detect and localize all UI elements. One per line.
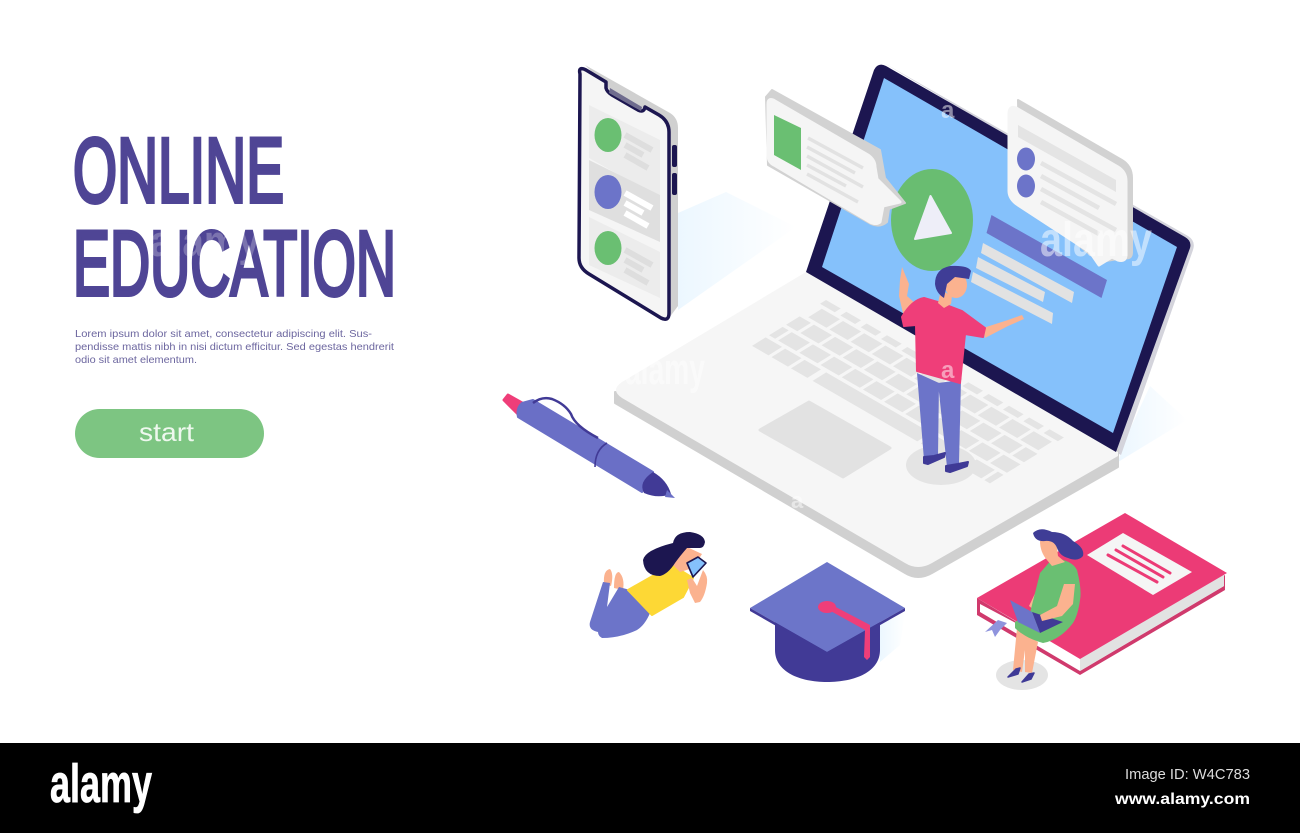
watermarks: alamy [625, 345, 705, 394]
body text: Lorem ipsum dolor sit amet, consectetur adipiscing elit. Sus- [75, 328, 373, 340]
face [945, 272, 967, 298]
phone notch detail [609, 88, 642, 111]
phone in hand [687, 557, 706, 577]
pointing arm [983, 315, 1024, 338]
phone card two [589, 160, 660, 242]
phone buttons [672, 145, 677, 195]
feet [604, 569, 624, 590]
legs [1013, 628, 1038, 673]
legs [917, 373, 961, 467]
book cover [977, 513, 1227, 659]
watermarks: alamy [150, 217, 260, 266]
graduation cap [750, 562, 905, 682]
shadow under man [906, 445, 976, 485]
girl lying with phone [590, 532, 707, 638]
title: ONLINE [73, 120, 284, 222]
play button [891, 169, 973, 271]
pen tip [642, 472, 671, 496]
start button: start [139, 417, 195, 447]
laptop base side [615, 392, 1118, 577]
shoes [1008, 668, 1034, 682]
footer image id: Image ID: W4C783 [1125, 766, 1250, 783]
neck [938, 290, 952, 308]
near arm [1040, 584, 1075, 621]
trousers [590, 582, 650, 638]
phone [579, 65, 678, 319]
cap base [775, 622, 880, 682]
man standing on keyboard [899, 266, 1024, 485]
phone body [579, 69, 669, 319]
book pages [980, 573, 1224, 671]
laptop screen frame [806, 65, 1190, 452]
laptop screen display [822, 78, 1177, 433]
neck and face [672, 547, 702, 572]
raised arm [899, 267, 917, 322]
t-shirt [628, 565, 693, 615]
hair [935, 266, 971, 298]
dress [1015, 558, 1081, 643]
hair [643, 532, 705, 576]
watermarks: alamy [1040, 214, 1152, 267]
light glow by laptop [1118, 386, 1187, 462]
keyboard [759, 302, 1061, 479]
pen clip [533, 398, 598, 438]
light glow behind phone [678, 192, 796, 310]
girl sitting with laptop [996, 529, 1083, 690]
laptop lid [1010, 600, 1040, 633]
title: EDUCATION [73, 213, 396, 315]
book [977, 513, 1227, 675]
pen cap button [504, 395, 524, 414]
watermarks: a [791, 488, 804, 513]
laptop screen back edge [884, 63, 1194, 455]
body text [75, 328, 394, 366]
book label lines [1108, 546, 1170, 582]
arm [687, 570, 707, 603]
shoes [924, 453, 968, 472]
shadow [996, 660, 1048, 690]
footer url: www.alamy.com [1114, 791, 1250, 808]
body text: odio sit amet elementum. [75, 354, 197, 366]
touchpad [760, 402, 890, 477]
watermarks: a [941, 97, 955, 124]
footer logo: alamy [50, 754, 152, 814]
pen band [595, 443, 607, 467]
phone side [585, 65, 678, 318]
pen barrel [518, 400, 653, 492]
footer band [0, 743, 1300, 833]
cap tassel [818, 601, 870, 660]
phone card one [589, 105, 660, 198]
speech bubble left [766, 90, 905, 226]
bookmark [985, 620, 1007, 637]
shirt [902, 298, 985, 383]
title [73, 120, 396, 315]
speech bubble right [1009, 100, 1132, 265]
watermarks [150, 97, 1152, 513]
laptop deck [616, 272, 1118, 567]
neck and face [1040, 540, 1065, 566]
laptop [615, 63, 1194, 577]
book label [1087, 533, 1192, 595]
phone card three [589, 217, 660, 298]
far arm [1029, 583, 1044, 610]
pen [504, 395, 675, 498]
cap board [750, 562, 905, 652]
watermarks: a [941, 357, 955, 384]
start button [75, 409, 264, 458]
book back cover [977, 575, 1225, 675]
hair [1033, 529, 1083, 560]
cap glow [880, 612, 905, 662]
screen text bars [971, 215, 1107, 324]
laptop base [1032, 612, 1063, 633]
body text: pendisse mattis nibh in nisi dictum efficitur. Sed egestas hendrerit [75, 341, 394, 353]
